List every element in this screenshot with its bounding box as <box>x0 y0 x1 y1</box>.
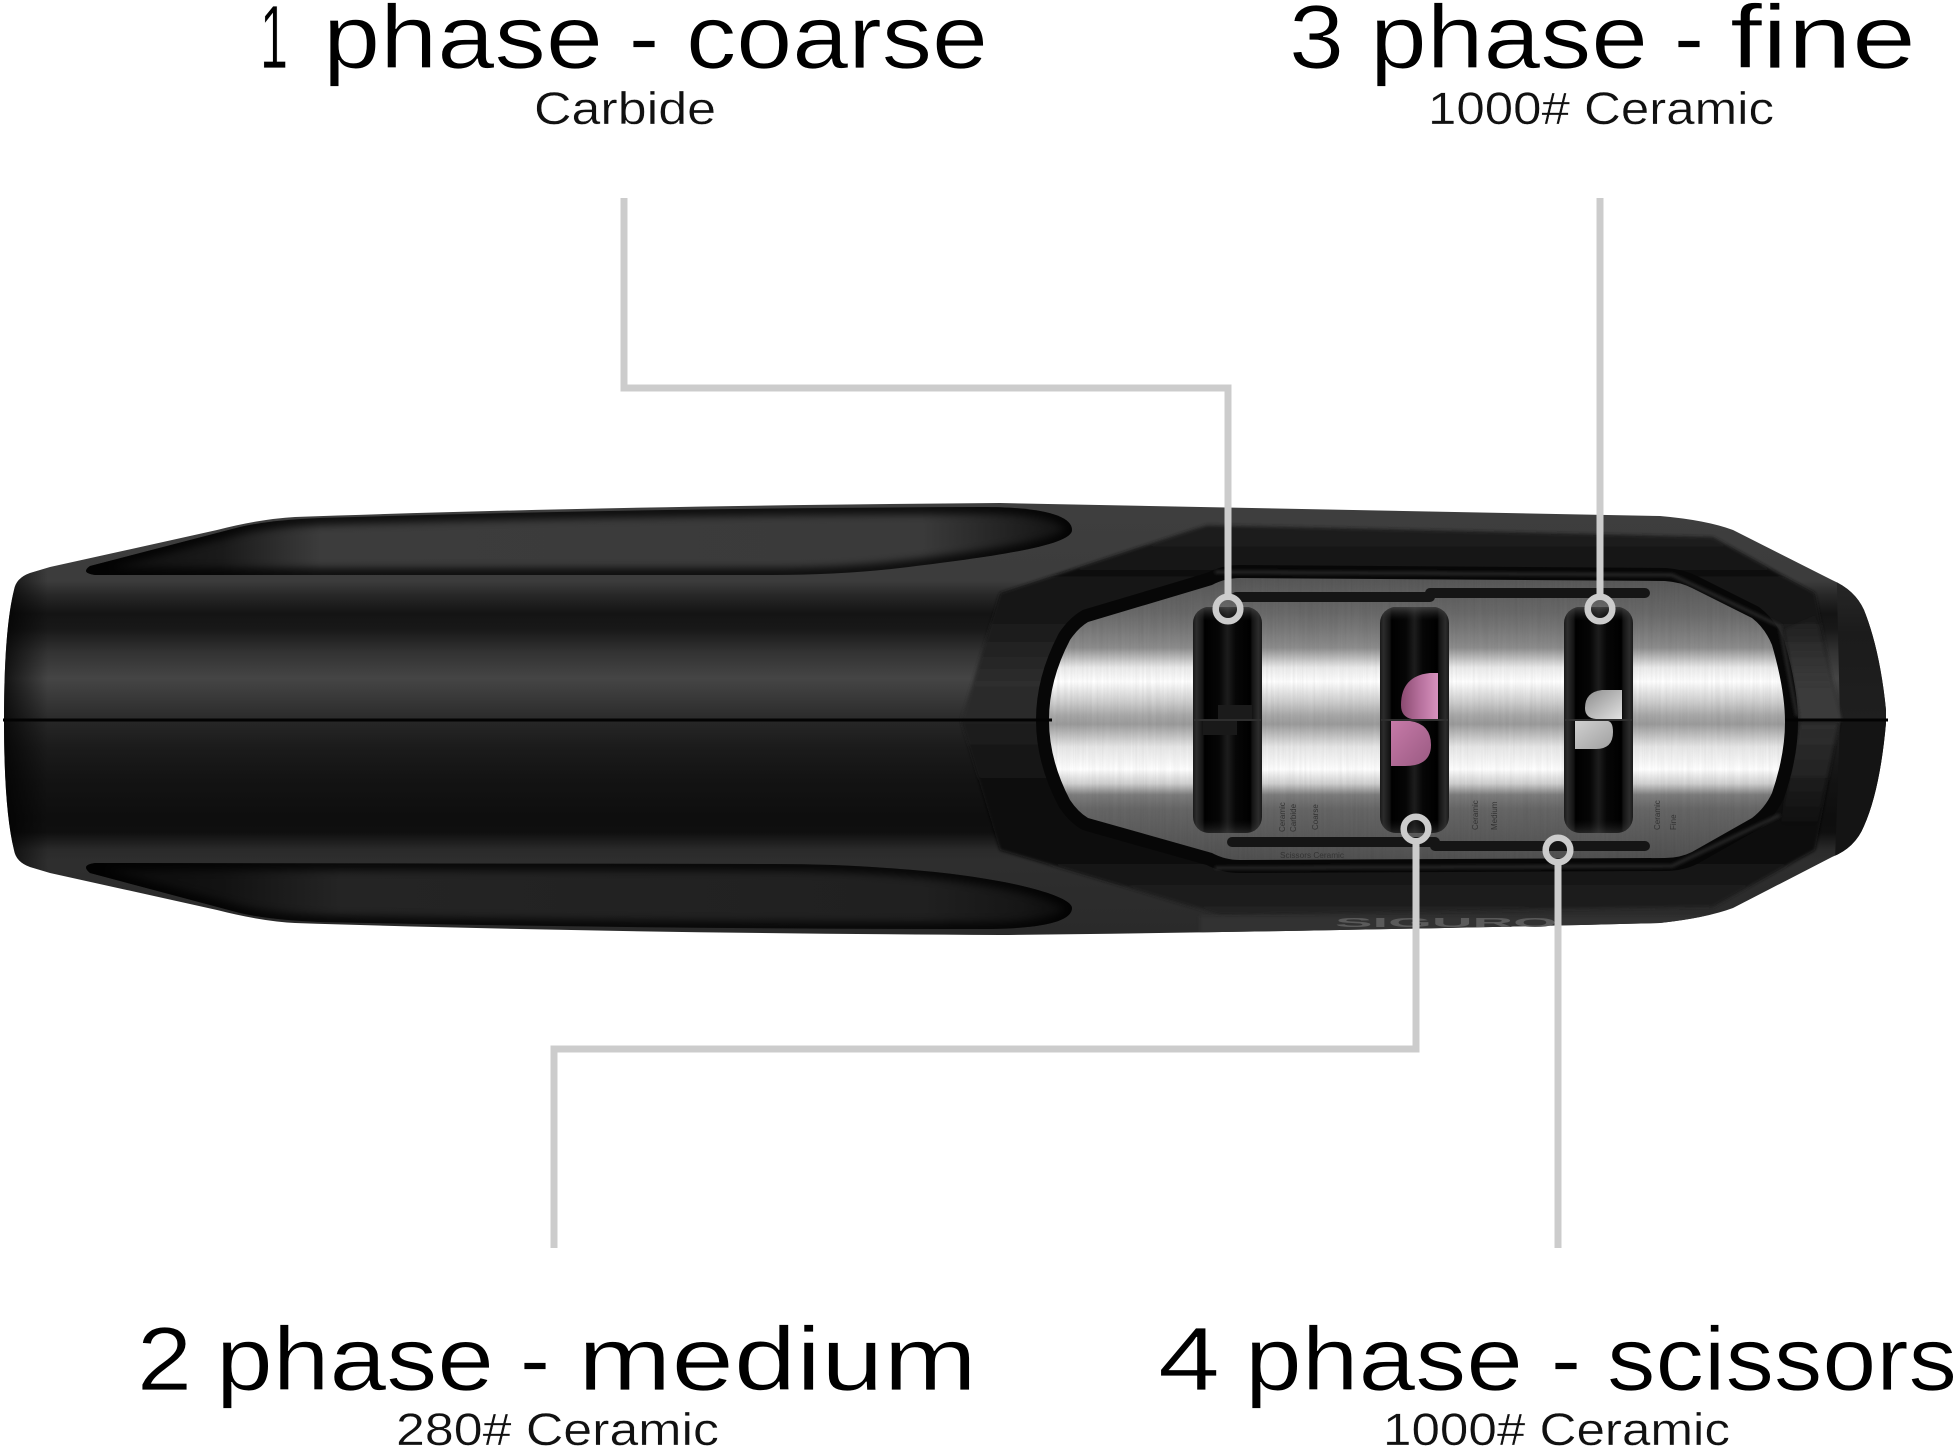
label: phase 4 scissors: - <box>1551 1310 1581 1410</box>
engraved labels <box>1278 800 1678 860</box>
callout line: phase 4 <box>1546 838 1570 1248</box>
top groove <box>1236 593 1645 597</box>
label: phase 4 scissors: phase <box>1245 1310 1523 1410</box>
label: phase 1 coarse <box>260 0 988 134</box>
frame highlights <box>1215 572 1797 868</box>
slot 2: medium ceramic <box>1380 607 1449 833</box>
frame: black rim around plate <box>1049 578 1785 860</box>
engraved labels: Ceramic <box>1278 802 1287 832</box>
brushed steel plate <box>1040 570 1790 865</box>
housing around the steel plate <box>961 525 1842 936</box>
product: sharpener body <box>0 500 1956 940</box>
body seam <box>3 718 1888 722</box>
engraved labels: Coarse <box>1311 804 1320 830</box>
label: phase 3 fine: 1000# Ceramic <box>1428 83 1774 134</box>
brand mark: SIGURO <box>1335 915 1557 930</box>
engraved labels: Fine <box>1669 814 1678 830</box>
label: phase 1 coarse: Carbide <box>534 83 716 134</box>
callout line: phase 1 <box>624 198 1240 621</box>
engraved labels: Carbide <box>1289 803 1298 832</box>
label: phase 3 fine <box>1289 0 1916 134</box>
body shell <box>0 500 1956 940</box>
bottom groove <box>1232 842 1645 846</box>
engraved labels: Ceramic <box>1653 800 1662 830</box>
label: phase 2 medium <box>137 1310 977 1446</box>
label: phase 2 medium: medium <box>578 1310 977 1410</box>
slot 1: carbide <box>1193 607 1262 833</box>
callout line: phase 2 <box>554 817 1428 1248</box>
top grip recess <box>86 507 1072 575</box>
label: phase 2 medium: phase <box>216 1310 494 1410</box>
label: phase 4 scissors: 4 <box>1158 1310 1220 1410</box>
slot 3: fine ceramic <box>1564 607 1633 833</box>
engraved labels: Medium <box>1490 801 1499 830</box>
label: phase 2 medium: - <box>520 1310 550 1410</box>
engraved labels: Scissors Ceramic <box>1280 851 1344 860</box>
label: phase 4 scissors: scissors <box>1607 1310 1956 1410</box>
bottom grip recess <box>86 863 1072 929</box>
label: phase 4 scissors <box>1158 1310 1956 1446</box>
engraved labels: Ceramic <box>1471 800 1480 830</box>
callout line: phase 3 <box>1588 198 1612 621</box>
label: phase 2 medium: 2 <box>137 1310 192 1410</box>
